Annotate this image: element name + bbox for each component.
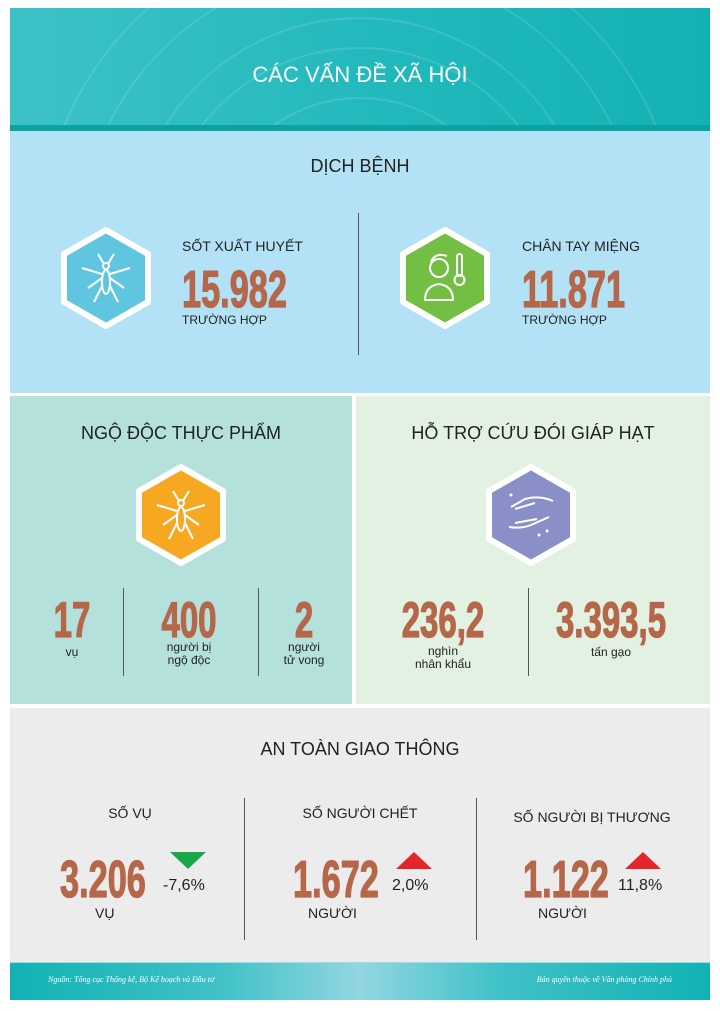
stat: số người bị thương: NGƯỜI <box>538 905 587 921</box>
panel: an toàn giao thông <box>10 708 710 962</box>
stat: 236,2 nghìn nhân khẩu: nhân khẩu <box>415 657 471 671</box>
stat: 2 người tử vong: 2 <box>295 592 313 648</box>
copyright note: Bản quyền thuộc về Văn phòng Chính phủ <box>537 975 672 984</box>
heading: DỊCH BỆNH <box>310 156 410 176</box>
icon: mosquito hexagon blue <box>61 227 151 329</box>
stat: sốt xuất huyết <box>182 238 303 327</box>
footer <box>10 962 710 1000</box>
stat: 3.393,5 tấn gạo: tấn gạo <box>591 645 631 659</box>
stat: số vụ: 3.206 <box>60 851 146 909</box>
stat: 17 vụ: vụ <box>66 645 78 659</box>
stat: số người chết: NGƯỜI <box>308 905 357 921</box>
panel: hỗ trợ cứu đói <box>356 396 710 704</box>
stat: 2 người tử vong <box>284 592 324 667</box>
stat: số người bị thương: 11,8% <box>618 877 662 894</box>
stat: số người chết: 1.672 <box>293 851 379 909</box>
stat: số người bị thương: 1.122 <box>523 851 609 909</box>
stat: số người bị thương: SỐ NGƯỜI BỊ THƯƠNG <box>513 809 671 825</box>
stat: 2 người tử vong: người <box>288 640 320 654</box>
header banner <box>10 8 710 131</box>
panel: ngộ độc thực phẩm <box>10 396 352 704</box>
heading: HỖ TRỢ CỨU ĐÓI GIÁP HẠT <box>411 423 655 443</box>
stat: 236,2 nghìn nhân khẩu: 236,2 <box>402 592 484 648</box>
heading: NGỘ ĐỘC THỰC PHẨM <box>81 423 281 443</box>
stat: số vụ: -7,6% <box>163 877 205 894</box>
stat: 236,2 nghìn nhân khẩu: nghìn <box>428 644 458 658</box>
stat: số người chết: 2,0% <box>392 877 428 894</box>
heading: AN TOÀN GIAO THÔNG <box>260 739 460 759</box>
stat: số vụ: VỤ <box>95 905 114 921</box>
stat: số vụ: SỐ VỤ <box>108 805 152 821</box>
stat: chân tay miệng: TRƯỜNG HỢP <box>522 313 607 327</box>
stat: 400 người bị ngộ độc: ngộ độc <box>168 653 210 667</box>
stat: 400 người bị ngộ độc: 400 <box>161 592 217 648</box>
stat: số người chết <box>293 805 432 921</box>
stat: chân tay miệng: CHÂN TAY MIỆNG <box>522 238 640 254</box>
icon: hands hexagon purple <box>486 464 576 566</box>
stat: số vụ <box>60 805 206 921</box>
stat: sốt xuất huyết: TRƯỜNG HỢP <box>182 313 267 327</box>
stat: số người chết: SỐ NGƯỜI CHẾT <box>303 805 417 821</box>
panel: dịch bệnh <box>10 131 710 393</box>
stat: 400 người bị ngộ độc: người bị <box>167 640 211 654</box>
source note: Nguồn: Tổng cục Thống kê, Bộ Kế hoạch và Đầu tư <box>48 975 214 984</box>
stat: 2 người tử vong: tử vong <box>284 653 324 667</box>
stat: chân tay miệng <box>522 238 640 327</box>
stat: sốt xuất huyết: SỐT XUẤT HUYẾT <box>182 238 303 254</box>
stat: sốt xuất huyết: 15.982 <box>182 261 287 319</box>
stat: 3.393,5 tấn gạo: 3.393,5 <box>556 592 666 648</box>
icon: mosquito hexagon orange <box>136 464 226 566</box>
icon: patient hexagon green <box>400 227 490 329</box>
stat: chân tay miệng: 11.871 <box>522 261 625 319</box>
stat: số người bị thương <box>513 809 671 921</box>
title: CÁC VẤN ĐỀ XÃ HỘI <box>252 62 468 87</box>
stat: 17 vụ: 17 <box>54 592 90 648</box>
